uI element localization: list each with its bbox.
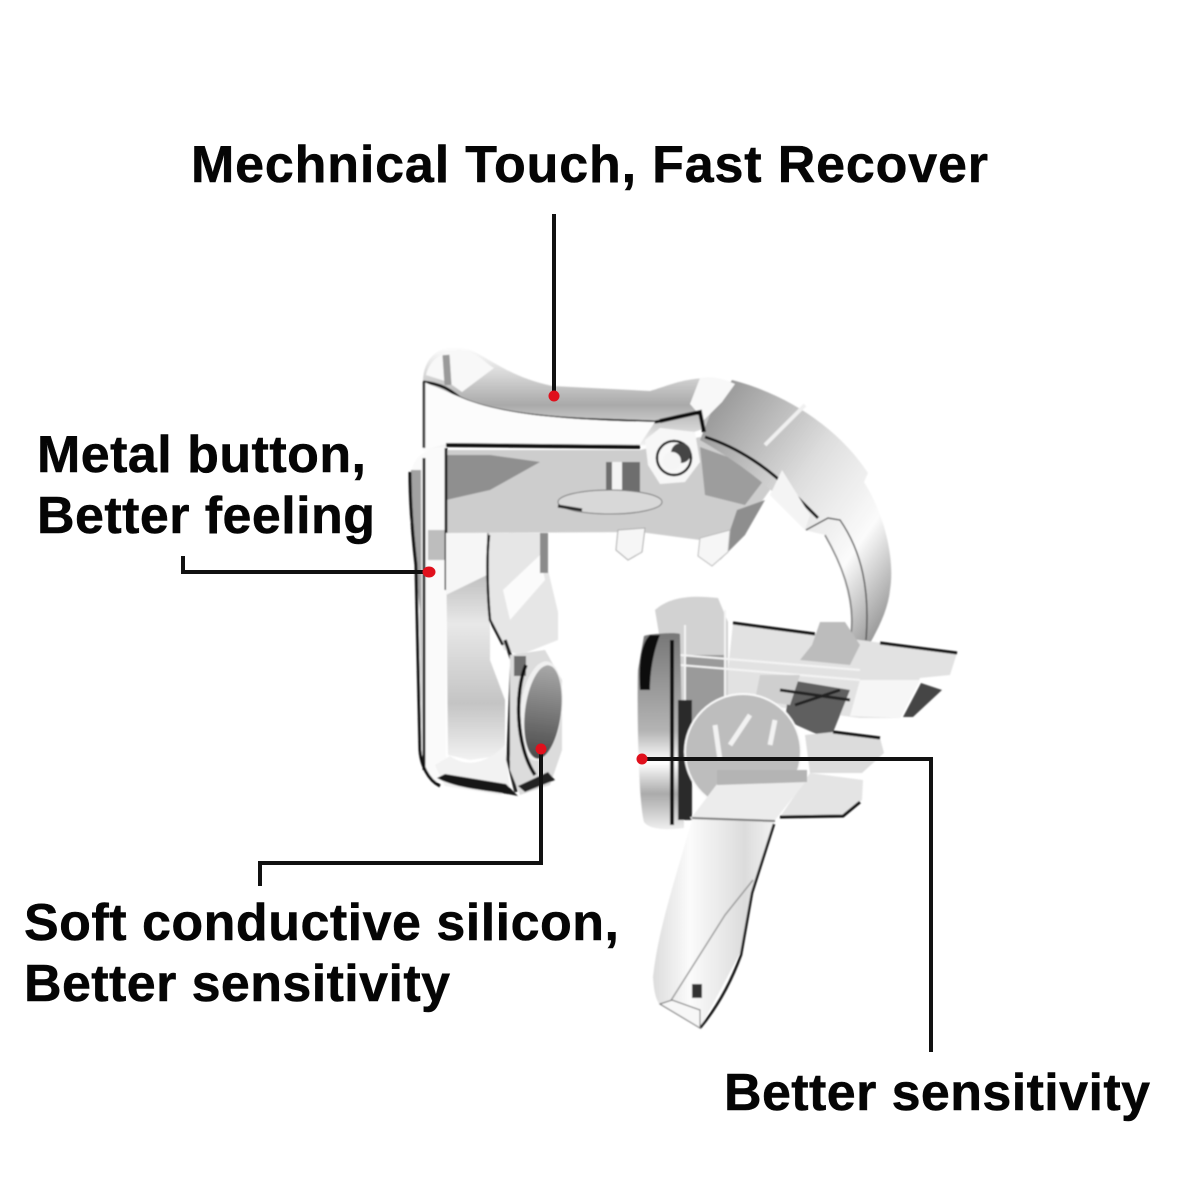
- dark tab: [903, 683, 942, 717]
- white pins: [616, 528, 645, 560]
- label: metal button: Metal button,: [37, 426, 366, 484]
- leader line: top button: [548, 214, 560, 402]
- leader line: better sensitivity: [636, 754, 931, 1052]
- right trigger assembly: [638, 597, 957, 1028]
- lever handle: [653, 817, 775, 1028]
- pad: [638, 633, 684, 829]
- lower fin stack: [805, 732, 884, 773]
- soft conductive silicon pad: [514, 659, 568, 763]
- left rail: [410, 447, 446, 782]
- label: metal button: Better feeling: [37, 487, 375, 545]
- top metal button: [423, 347, 735, 452]
- product photo: transparent trigger button: [410, 347, 957, 1028]
- rear housing: [655, 597, 728, 735]
- label: soft conductive silicon: Better sensitivity: [24, 955, 450, 1013]
- silicon neck: [510, 650, 562, 795]
- label: soft conductive silicon: Soft conductive silicon,: [24, 894, 619, 952]
- label: better sensitivity: Better sensitivity: [724, 1064, 1150, 1122]
- curved arc connector: [660, 377, 891, 650]
- lower grey panel: [446, 533, 505, 760]
- top fin: [725, 623, 957, 718]
- mounting screw boss: [645, 428, 700, 484]
- lever collar: [692, 780, 807, 820]
- round hinge: [685, 694, 801, 810]
- title: mechanical touch: Mechnical Touch, Fast Recover: [191, 136, 988, 194]
- leader line: metal button: [183, 556, 436, 578]
- left metal frame: [410, 347, 782, 796]
- inner grey body: [446, 437, 782, 540]
- leader line: conductive silicon: [260, 744, 546, 886]
- inner arm: [489, 533, 558, 655]
